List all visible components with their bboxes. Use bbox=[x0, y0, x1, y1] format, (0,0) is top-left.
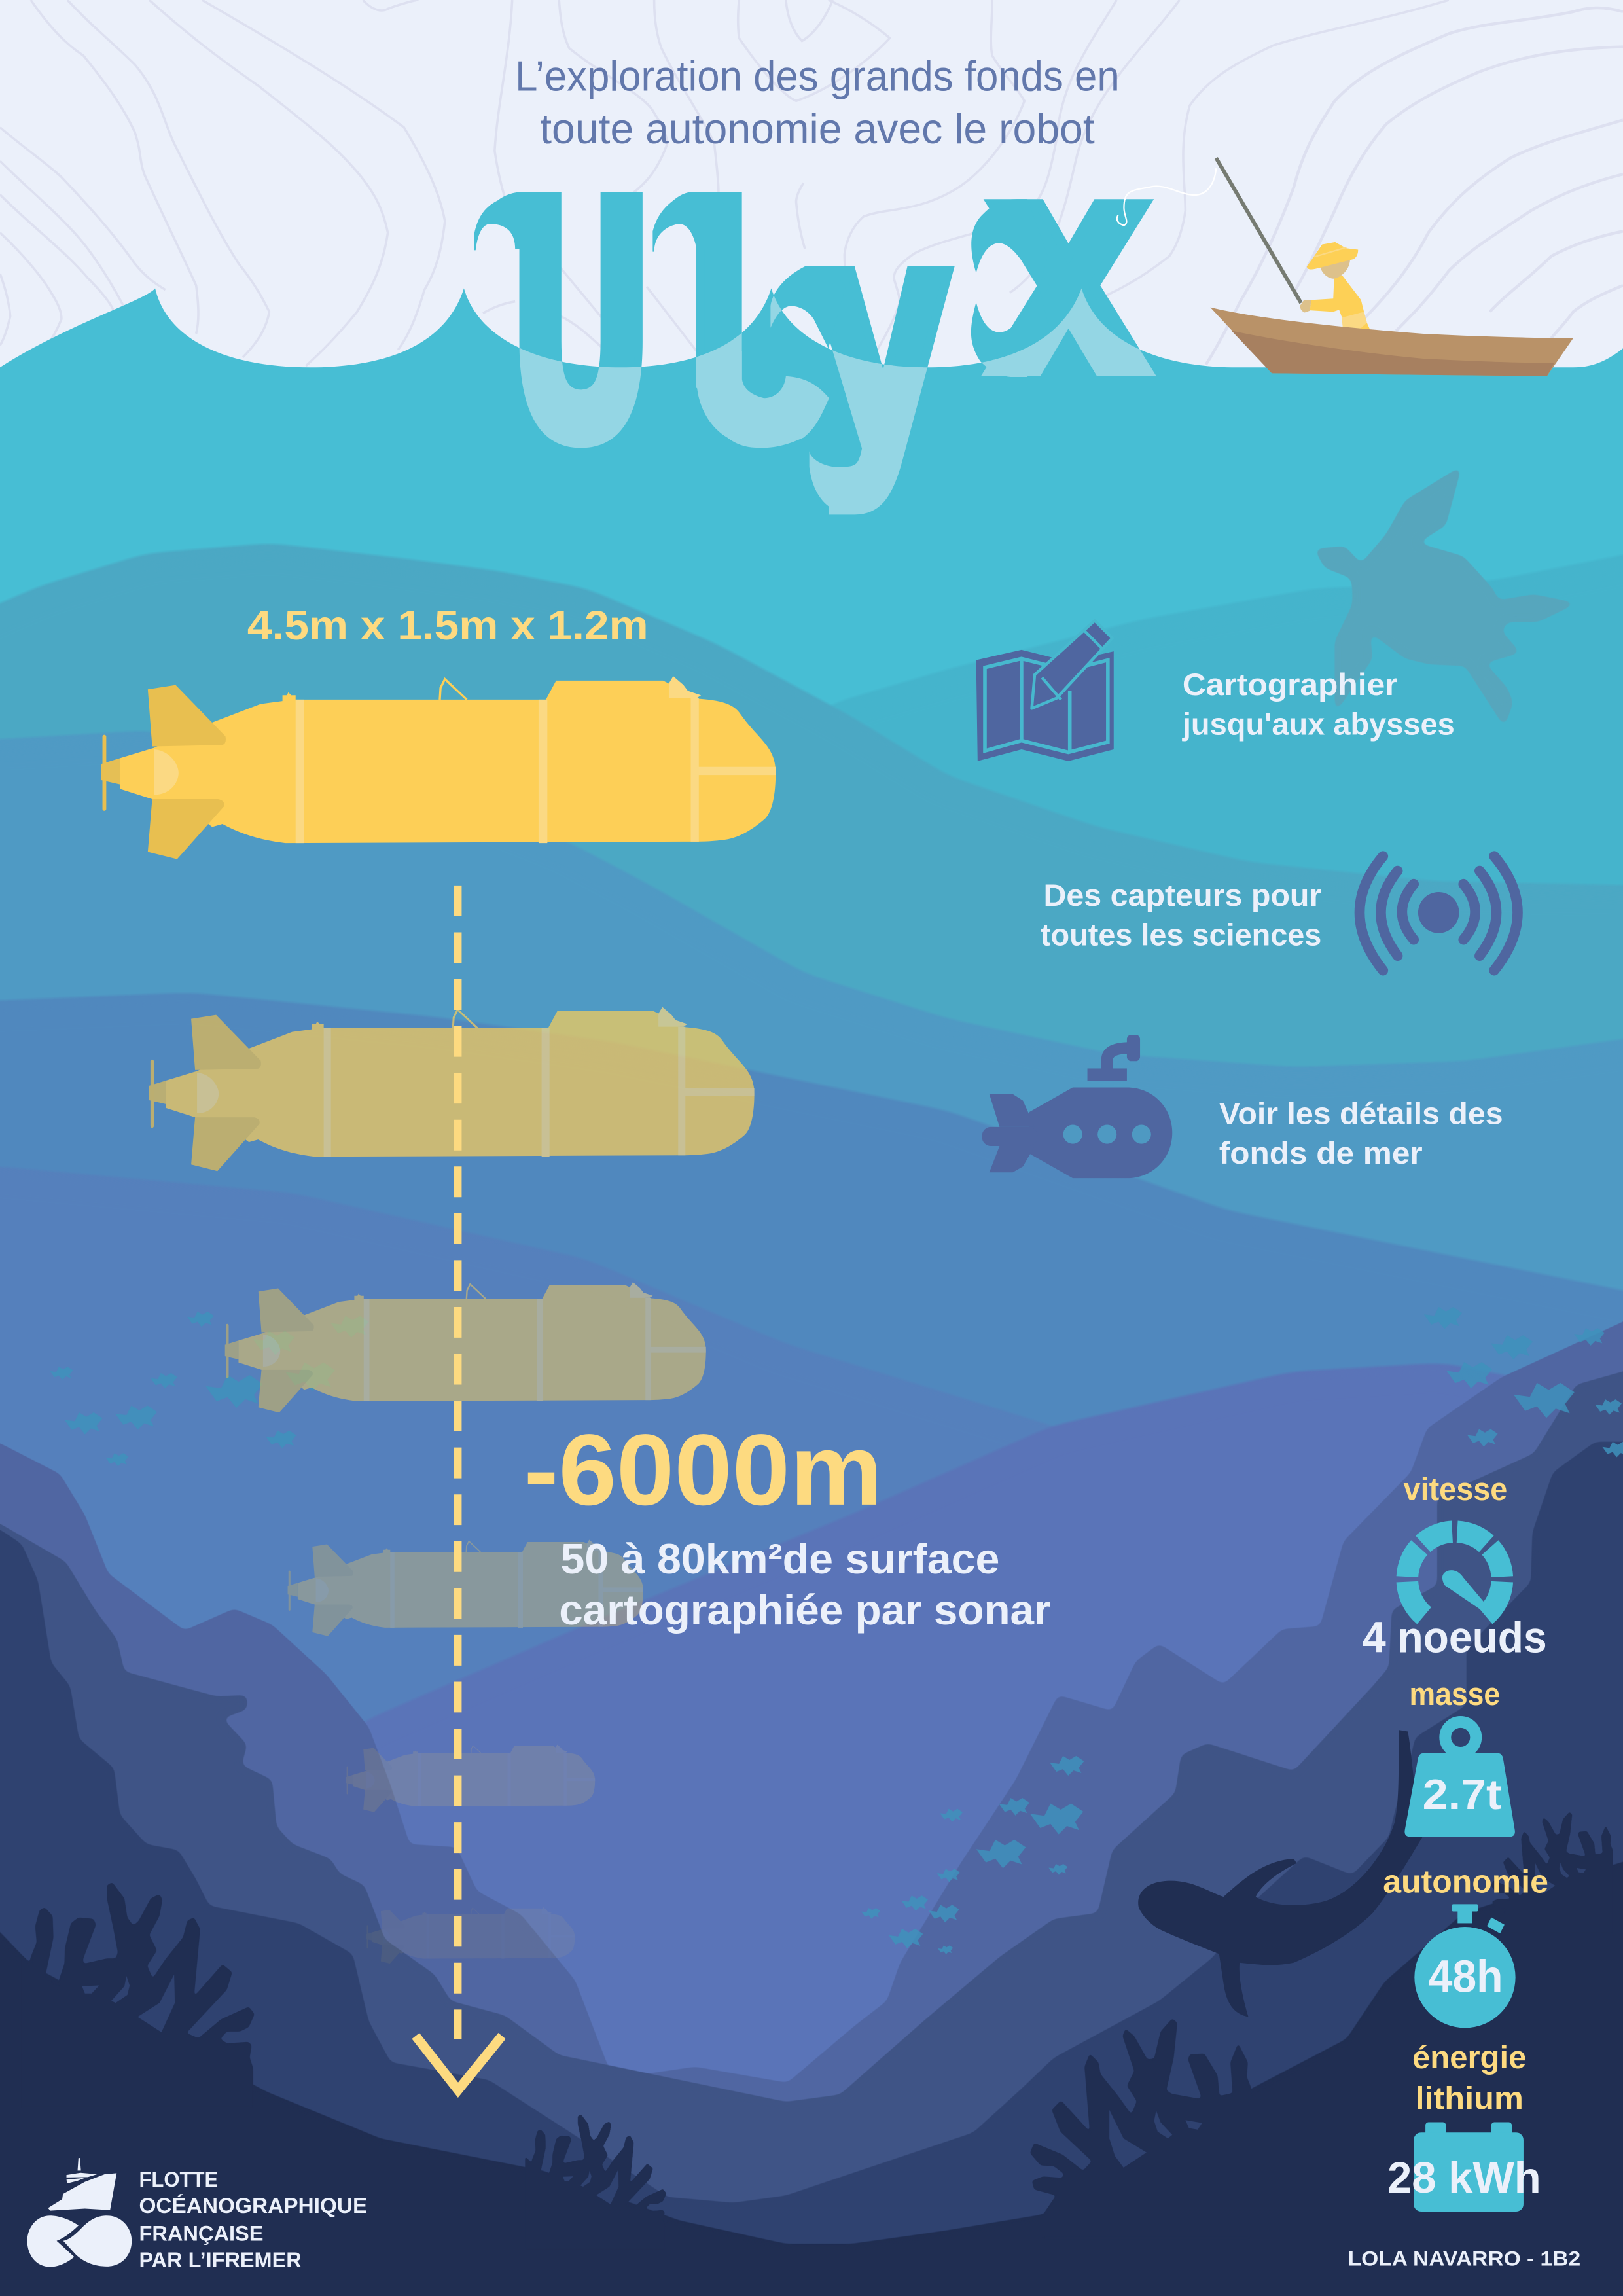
robot 3 bbox=[225, 1282, 706, 1412]
stat: speed: 4 noeuds bbox=[1363, 1613, 1547, 1662]
coral: left bbox=[19, 1882, 255, 2108]
mountains bbox=[0, 1288, 1623, 2296]
stat: autonomy bbox=[1383, 1863, 1548, 2028]
fishing boat with fisherman bbox=[1117, 158, 1573, 376]
fleet text: FLOTTE bbox=[139, 2168, 218, 2191]
fish schools bbox=[50, 1307, 1623, 1954]
fleet text bbox=[139, 2168, 367, 2272]
sea floor bbox=[0, 1847, 1623, 2296]
coral: bottom right bbox=[1030, 2018, 1251, 2239]
icon: weight bbox=[1404, 1722, 1515, 1837]
fisherman face bbox=[1320, 258, 1350, 279]
boat shade bbox=[1232, 331, 1554, 376]
subtitle bbox=[515, 52, 1120, 152]
title: Ulyx reflection below the waterline: x bbox=[987, 90, 1150, 442]
stat: energy: énergie bbox=[1412, 2039, 1526, 2075]
stat: mass: 2.7t bbox=[1423, 1770, 1501, 1818]
fishing line and hook bbox=[1117, 168, 1216, 225]
robot 2 bbox=[149, 1007, 755, 1171]
credit: LOLA NAVARRO - 1B2 bbox=[1348, 2248, 1580, 2270]
water layers bbox=[0, 534, 1623, 2296]
label: submarine: fonds de mer bbox=[1219, 1136, 1423, 1170]
title: Ulyx above the waterline: x bbox=[987, 90, 1150, 442]
robot 6 bbox=[366, 1907, 575, 1964]
robot descent sequence bbox=[101, 676, 776, 1964]
fleet text: OCÉANOGRAPHIQUE bbox=[139, 2193, 367, 2217]
title: Ulyx above the waterline: U bbox=[506, 133, 656, 514]
coral: far right bbox=[1491, 1812, 1613, 1933]
stat: energy: 28 kWh bbox=[1387, 2153, 1541, 2202]
label: sensors bbox=[1041, 878, 1321, 952]
topographic contour lines bbox=[0, 0, 1623, 366]
surface text bbox=[559, 1535, 1051, 1634]
robot 5 bbox=[346, 1745, 595, 1812]
stat: speed: vitesse bbox=[1404, 1471, 1507, 1507]
icon: fleet logo bbox=[27, 2158, 132, 2267]
fisherman hand bbox=[1300, 300, 1311, 312]
stat: mass: masse bbox=[1410, 1676, 1500, 1712]
fishing rod bbox=[1216, 158, 1301, 303]
fleet text: FRANÇAISE bbox=[139, 2222, 264, 2246]
stat: energy: lithium bbox=[1415, 2080, 1524, 2116]
fisherman hat bbox=[1307, 242, 1358, 270]
robot 1 bbox=[101, 676, 776, 859]
label: map bbox=[1182, 667, 1455, 742]
title: Ulyx reflection below the waterline: l bbox=[682, 155, 756, 441]
title: Ulyx reflection below the waterline bbox=[520, 288, 1156, 514]
stat: autonomy: autonomie bbox=[1383, 1863, 1548, 1899]
stat: energy bbox=[1387, 2039, 1541, 2212]
boat hull bbox=[1210, 308, 1573, 376]
title: Ulyx reflection below the waterline: y bbox=[812, 156, 952, 515]
label: map: jusqu'aux abysses bbox=[1182, 707, 1455, 742]
hat band bbox=[1314, 247, 1346, 257]
label: sensors: Des capteurs pour bbox=[1043, 878, 1321, 912]
fisherman coat bbox=[1310, 275, 1370, 331]
label: submarine bbox=[1219, 1096, 1503, 1170]
surface text: 50 à 80km²de surface bbox=[560, 1535, 999, 1583]
title: Ulyx reflection below the waterline: U bbox=[506, 133, 656, 514]
title: Ulyx above the waterline bbox=[474, 90, 1150, 515]
coral: bottom centre bbox=[525, 2114, 666, 2250]
stat: autonomy: 48h bbox=[1429, 1951, 1503, 2002]
label: map: Cartographier bbox=[1183, 667, 1398, 702]
icon: sonar signal bbox=[1359, 856, 1518, 971]
icon: submarine bbox=[982, 1035, 1172, 1178]
label: sensors: toutes les sciences bbox=[1041, 918, 1321, 952]
fisherman shorts bbox=[1342, 312, 1367, 329]
robot 4 bbox=[288, 1539, 643, 1636]
label: submarine: Voir les détails des bbox=[1219, 1096, 1503, 1130]
subtitle: L’exploration des grands fonds en bbox=[515, 52, 1120, 100]
icon: battery bbox=[1414, 2123, 1524, 2212]
dimensions label: 4.5m x 1.5m x 1.2m bbox=[247, 603, 649, 649]
icon: stopwatch bbox=[1414, 1904, 1516, 2028]
title: Ulyx above the waterline: l bbox=[682, 155, 756, 441]
title: Ulyx above the waterline: y bbox=[812, 156, 952, 515]
subtitle: toute autonomie avec le robot bbox=[540, 105, 1095, 152]
turtle bbox=[1314, 465, 1578, 727]
stat: speed bbox=[1363, 1471, 1547, 1662]
whale bbox=[1138, 1730, 1423, 2017]
depth figure: -6000m bbox=[524, 1413, 882, 1526]
stat: mass bbox=[1404, 1676, 1515, 1837]
icon: map and pencil bbox=[976, 620, 1114, 761]
icon: gauge bbox=[1407, 1532, 1502, 1616]
arrow: descent dashed line bbox=[416, 886, 502, 2090]
fleet text: PAR L’IFREMER bbox=[139, 2248, 302, 2272]
surface text: cartographiée par sonar bbox=[559, 1586, 1051, 1634]
